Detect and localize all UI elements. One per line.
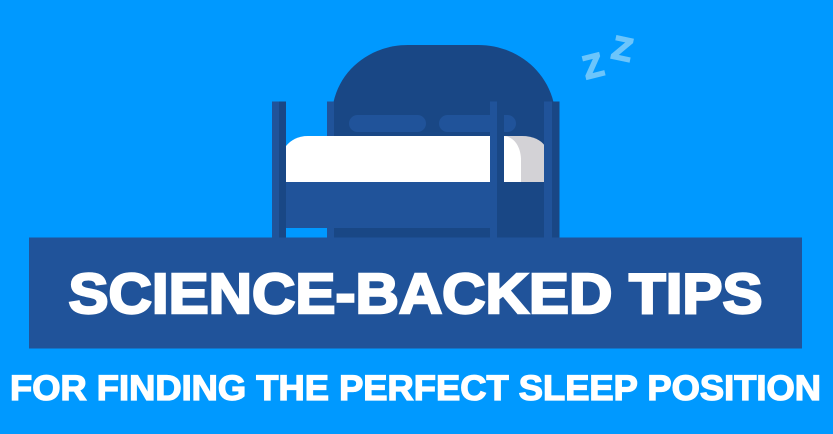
mattress side	[490, 136, 545, 182]
under bed shadow	[334, 228, 490, 238]
bed frame side	[286, 182, 497, 228]
front right bedpost	[490, 102, 497, 238]
icon: bed	[272, 45, 560, 238]
back right bedpost	[544, 102, 560, 238]
sheet	[286, 136, 521, 182]
bed frame end	[497, 182, 544, 238]
subtitle: FOR FINDING THE PERFECT SLEEP POSITION	[10, 369, 821, 408]
pillow left	[349, 115, 426, 132]
front right bedpost shade	[497, 102, 504, 238]
small z: Z	[579, 45, 607, 86]
icon: sleeping z letters	[579, 28, 636, 86]
large z: Z	[609, 28, 636, 69]
title banner	[29, 238, 802, 348]
pillow right	[439, 115, 516, 132]
headboard	[334, 45, 554, 238]
front left bedpost	[272, 102, 286, 238]
title: SCIENCE-BACKED TIPS	[68, 262, 762, 326]
back left bedpost	[327, 102, 334, 238]
